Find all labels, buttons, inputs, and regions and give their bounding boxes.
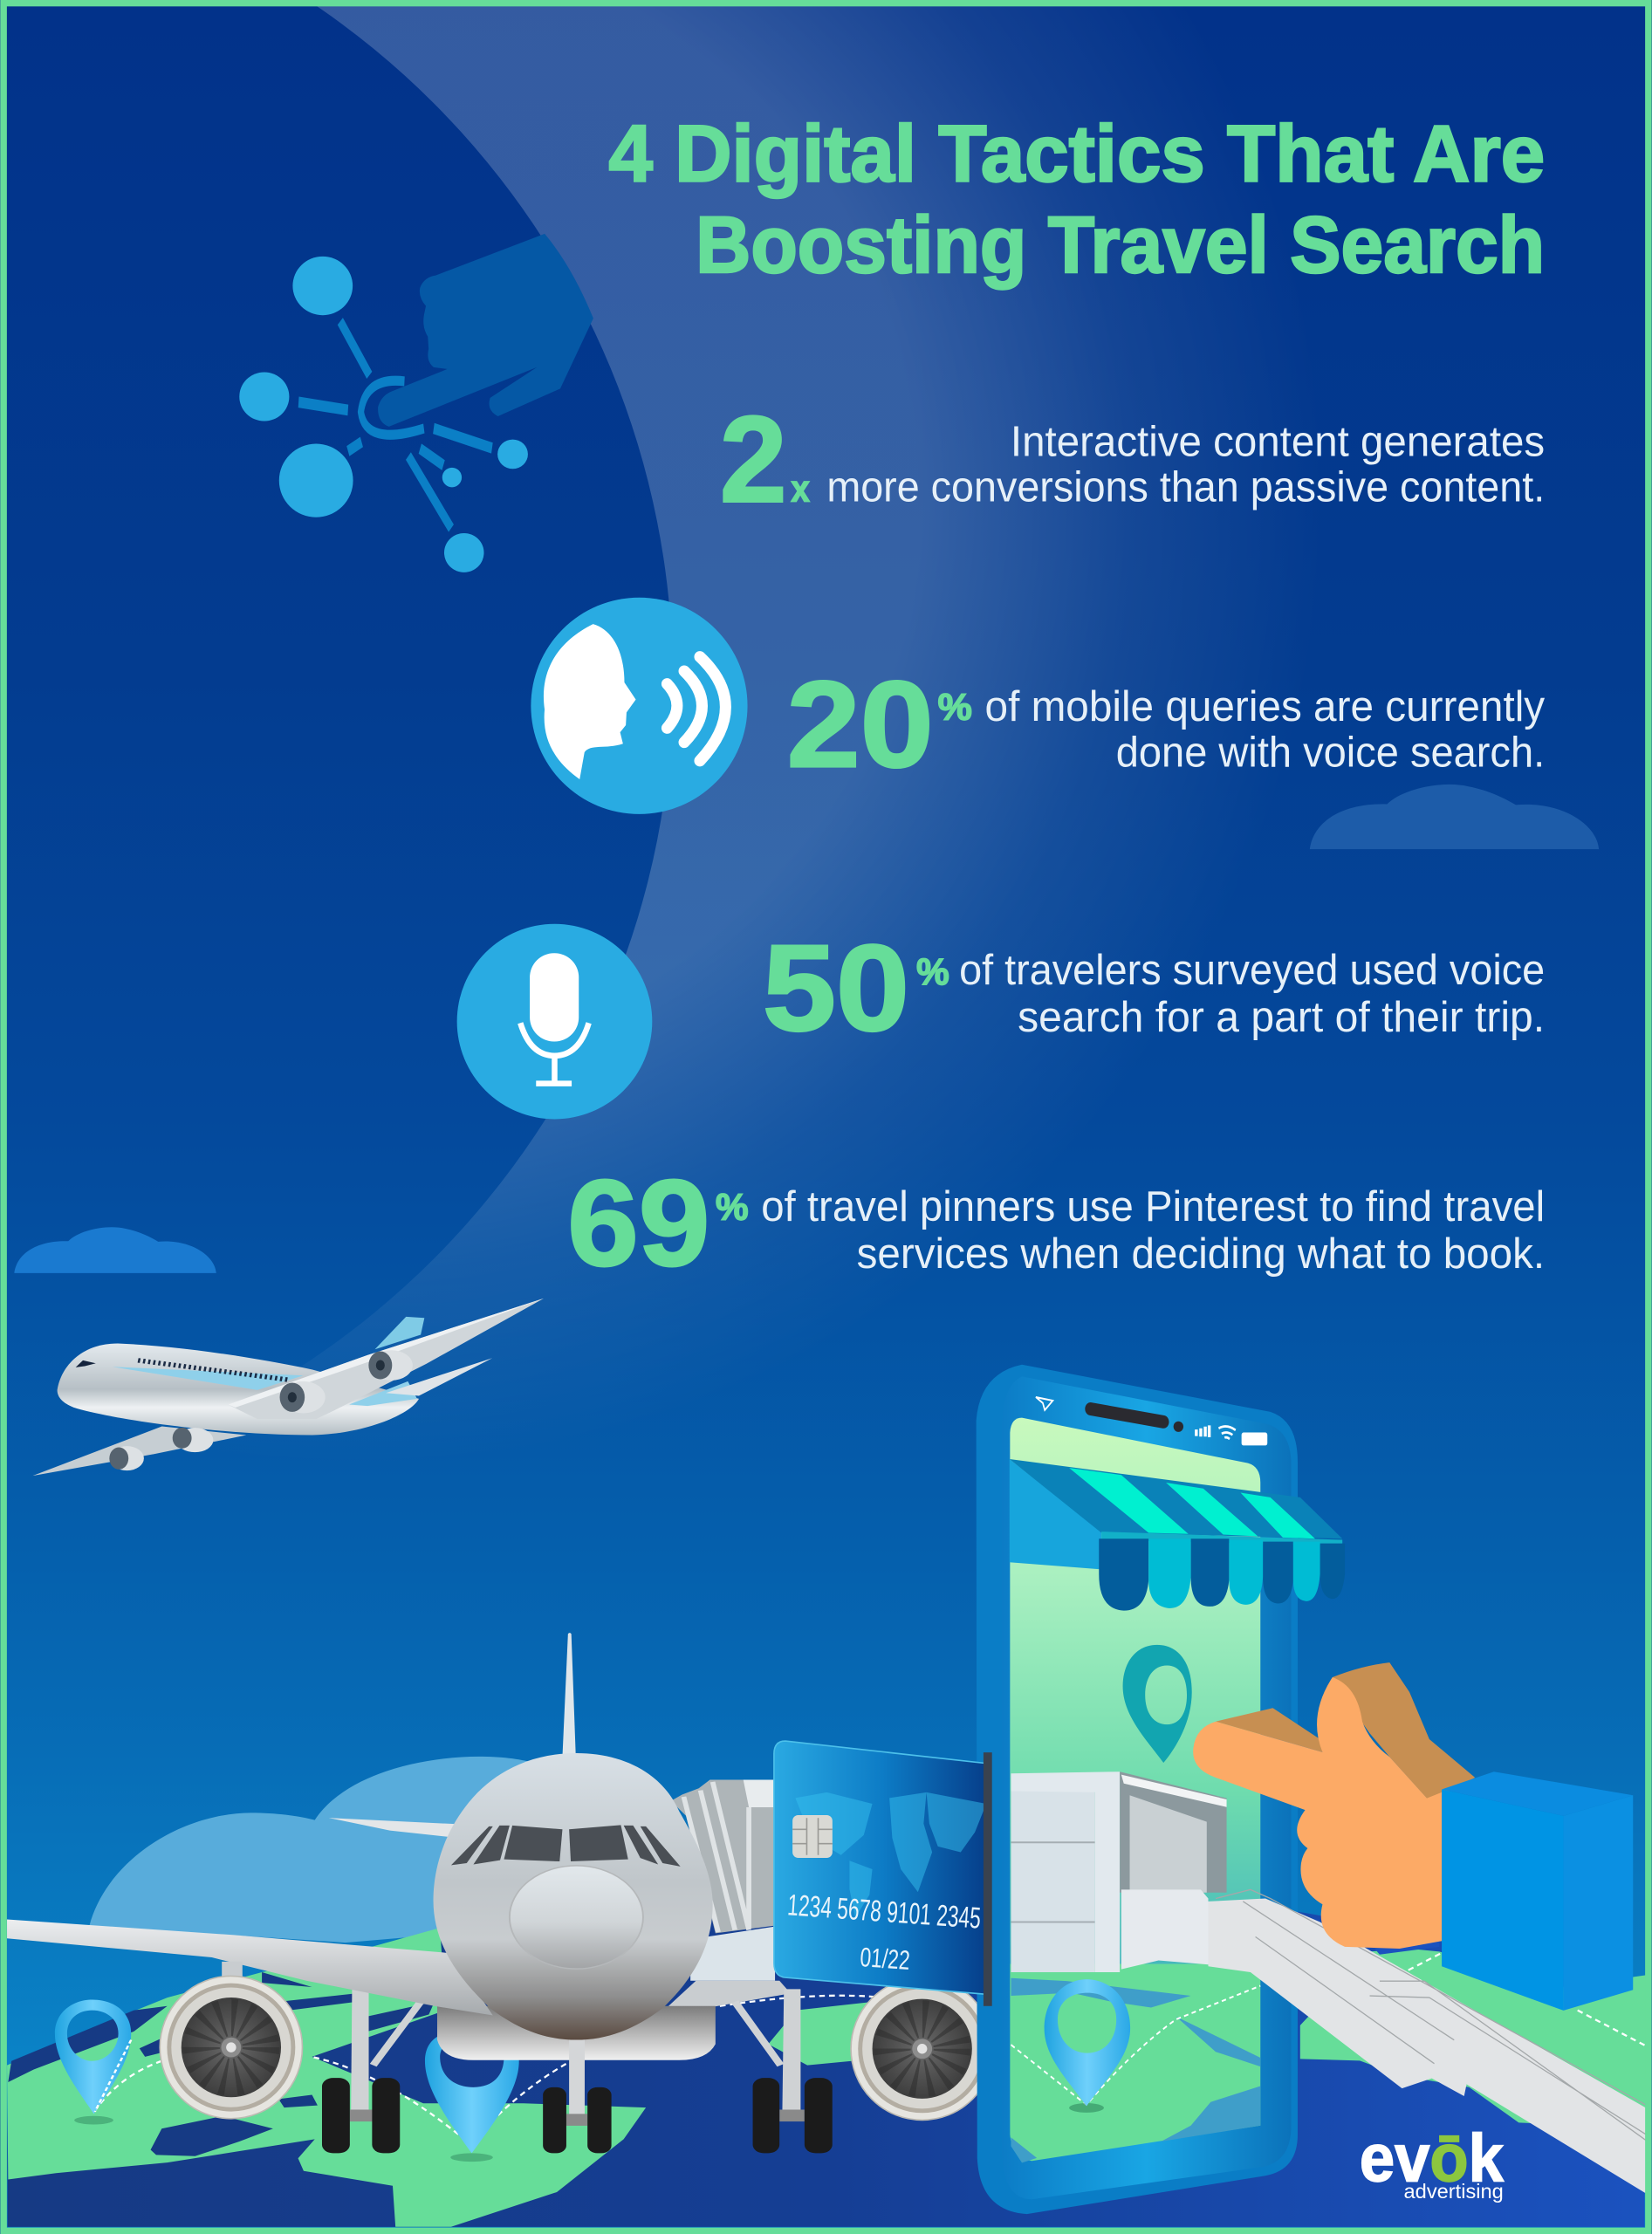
screen [1010, 1418, 1260, 2161]
stat: 2x interactive content: x [791, 469, 810, 510]
phone body [977, 1365, 1298, 2214]
stat: 2x interactive content: Interactive content generates [1011, 418, 1545, 465]
map pin middle [425, 2029, 519, 2162]
stat: 50% travelers voice search: search for a part of their trip. [1018, 994, 1545, 1041]
stat: 69% Pinterest: of travel pinners use Pinterest to find travel [761, 1183, 1545, 1230]
right engine [851, 1977, 993, 2120]
card chip [792, 1815, 833, 1858]
stat: 20% mobile voice queries: % [938, 686, 972, 727]
wing left [7, 1919, 493, 2015]
nose gear [543, 2036, 612, 2153]
blue map pin on screen [1045, 1979, 1130, 2113]
left main gear [322, 1989, 421, 2153]
stat: 50% travelers voice search [763, 919, 1545, 1056]
building [1011, 1771, 1227, 1972]
stat: 2x interactive content [720, 391, 1545, 528]
pointing hand with cuff [1193, 1662, 1633, 2011]
card number: 1234 5678 9101 2345 [786, 1888, 982, 1936]
stat: 69% Pinterest: % [716, 1187, 749, 1228]
credit card [774, 1741, 992, 2006]
title: 4 Digital Tactics That Are [609, 109, 1545, 198]
map dashed routes [94, 1952, 1646, 2144]
stat: 50% travelers voice search: 50 [763, 919, 909, 1056]
world map on card [795, 1792, 986, 1918]
land left [7, 1928, 873, 2227]
stat: 69% Pinterest [567, 1155, 1545, 1292]
route lines on screen [1011, 1986, 1260, 2105]
stat: 69% Pinterest: 69 [567, 1155, 709, 1292]
cloud left [14, 1227, 216, 1273]
nose cone [510, 1866, 643, 1969]
title [609, 109, 1545, 290]
lighter crescent beam around dark circle [0, 0, 1652, 1567]
card expiry: 01/22 [859, 1942, 911, 1976]
logo: evok advertising: advertising [1404, 2180, 1504, 2203]
parked airplane front view [7, 1633, 833, 2153]
cockpit windows [451, 1825, 681, 1867]
screen water patches [1011, 1978, 1260, 2162]
smartphone storefront [977, 1365, 1345, 2214]
stairway from building [1208, 1889, 1646, 2193]
globe [7, 1881, 1646, 2227]
stat: 50% travelers voice search: of travelers surveyed used voice [959, 947, 1545, 994]
icon: speaking head in circle [531, 598, 748, 814]
background clouds behind parked plane [89, 1757, 535, 1943]
stat: 20% mobile voice queries: 20 [787, 655, 934, 792]
logo: evok advertising: evōk [1360, 2122, 1504, 2196]
stat: 20% mobile voice queries: of mobile queries are currently [985, 683, 1546, 730]
stat: 20% mobile voice queries [787, 655, 1546, 792]
icon: interactive network with pointing hand [239, 234, 593, 572]
icon: microphone in circle [457, 924, 652, 1119]
right main gear [735, 1989, 833, 2153]
stat: 20% mobile voice queries: done with voice search. [1116, 729, 1545, 776]
fuselage [434, 1753, 713, 2040]
stat: 2x interactive content: 2 [720, 391, 787, 528]
tailplane [329, 1818, 459, 1838]
teal pin on screen [1123, 1645, 1192, 1763]
stat: 69% Pinterest: services when deciding what to book. [857, 1230, 1545, 1278]
jet bridge accordion [657, 1780, 791, 2017]
left engine [160, 1976, 302, 2119]
flying airplane [32, 1299, 544, 1476]
belly fairing [437, 2006, 716, 2060]
awning [1010, 1459, 1345, 1611]
cloud right [1310, 785, 1599, 849]
map pin left [55, 2000, 131, 2124]
status bar [1036, 1397, 1267, 1445]
stat: 2x interactive content: more conversions than passive content. [826, 464, 1545, 511]
tail fin [562, 1633, 576, 1757]
title: Boosting Travel Search [696, 201, 1545, 290]
stat: 50% travelers voice search: % [916, 951, 949, 992]
land right [1300, 1934, 1646, 2128]
